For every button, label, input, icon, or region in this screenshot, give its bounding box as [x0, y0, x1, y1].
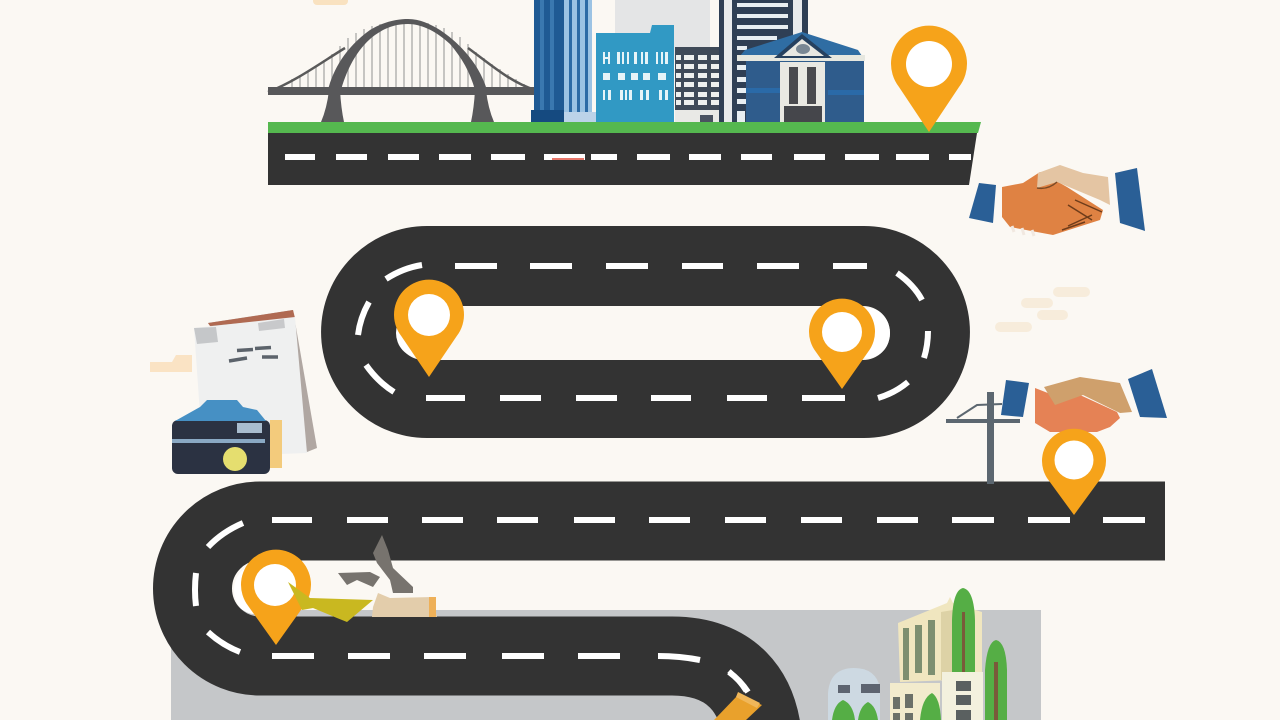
highlight behind lower pin [234, 566, 274, 614]
highlight behind left pin [396, 309, 440, 357]
utility pole [946, 392, 1020, 484]
tree: right [985, 640, 1007, 720]
pin: lower left [241, 550, 311, 645]
building: classical civic hall [737, 32, 865, 122]
document [194, 310, 317, 457]
lane dashes: lower serpentine [195, 520, 1145, 692]
cloud: left [150, 355, 192, 372]
pin: middle right [809, 299, 875, 389]
pin: middle left [394, 280, 464, 377]
building: blue tower [531, 0, 596, 122]
building: tall office tower [719, 0, 808, 122]
handshake: top [969, 165, 1145, 236]
trees: distant [832, 700, 878, 720]
building: white block [942, 672, 983, 720]
road: top straight [268, 133, 977, 185]
tree: tall left [952, 588, 975, 672]
building: light grey background [615, 0, 710, 60]
rubble and debris [288, 535, 437, 622]
road marker: orange pencil [714, 671, 762, 720]
bridge [268, 19, 535, 122]
highlight behind right pin [846, 308, 890, 358]
road: lower serpentine [192, 521, 1165, 720]
building: cream apartments [898, 597, 982, 682]
lane dashes: middle loop [358, 265, 928, 398]
lane dashes: top road [285, 154, 971, 160]
building: dark window block [675, 47, 720, 122]
pin: road right [1042, 429, 1106, 515]
building: teal block [596, 25, 674, 122]
tree: small front [920, 693, 941, 720]
handshake: right [1001, 369, 1167, 432]
building: distant dome [828, 668, 880, 720]
panel: grey ground [171, 610, 1041, 720]
cloud: top [313, 0, 348, 5]
camera [172, 400, 282, 474]
grass strip [268, 122, 981, 133]
pin: top [891, 26, 967, 132]
clouds: right [995, 287, 1090, 332]
building: lower cream block [890, 683, 940, 720]
road: middle loop [321, 226, 970, 438]
